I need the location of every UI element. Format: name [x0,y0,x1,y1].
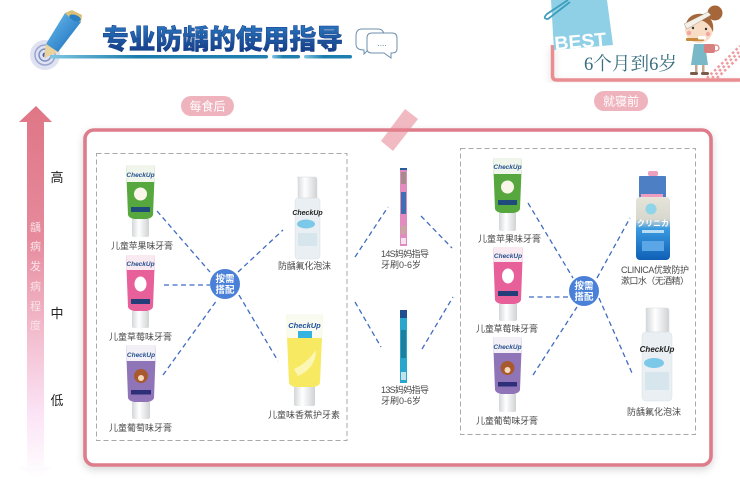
icon: speech bubbles: .... [378,39,386,48]
level labels: 低 [50,393,64,408]
label: 13S toothbrush [381,384,429,406]
label: strawberry toothpaste: 儿童草莓味牙膏 [109,331,172,342]
product: grape toothpaste: CheckUp [493,344,522,351]
connector lines [355,207,453,349]
arrow label: 病 [30,279,41,293]
hub: as needed: 按需 [215,273,235,285]
product: apple toothpaste [126,165,155,237]
arrow label: 龋 [30,220,41,234]
product: fluoride foam: CheckUp [640,345,674,354]
label: CLINICA mouthwash: 漱口水（无酒精） [621,275,689,286]
product: strawberry toothpaste [126,255,155,328]
arrow label: 病 [30,239,41,253]
label: 14S toothbrush: 牙刷0-6岁 [381,259,421,270]
product: apple toothpaste: CheckUp [493,164,522,171]
level labels [50,170,64,408]
panel: before-bed group [460,148,696,434]
panel: age card [545,0,740,80]
hub: as needed: 搭配 [574,291,594,303]
panel: main frame [85,130,711,465]
label: banana gel: 儿童味香蕉护牙素 [268,409,340,420]
age text: 6个月到6岁 [584,54,677,75]
icon: girl brushing teeth [684,6,722,75]
product: fluoride foam: CheckUp [292,210,323,217]
hub: as needed: 搭配 [215,284,235,296]
product: fluoride foam [640,308,674,401]
product: banana gel: CheckUp [288,321,321,330]
arrow label: 发 [30,259,41,273]
arrow: caries severity scale [19,106,52,480]
BEST badge text: BEST [554,29,608,55]
product: strawberry toothpaste [493,247,523,321]
arrow label [30,220,41,332]
icon: speech bubbles [356,29,397,58]
product: apple toothpaste: CheckUp [126,172,155,179]
product: CLINICA mouthwash [636,171,670,260]
pink dot ribbon [707,46,740,78]
product: 13S toothbrush [400,310,407,383]
hub: as needed [569,276,599,306]
title text: 专业防龋的使用指导 [102,24,343,55]
icon: pencil [44,10,82,58]
icon: target circle [30,40,60,70]
title underline [50,55,352,58]
panel: after-meal group [96,154,347,440]
product: CLINICA mouthwash: クリニカ [637,218,669,228]
label: apple toothpaste: 儿童苹果味牙膏 [478,233,541,244]
label: 13S toothbrush: 13S妈妈指导 [381,384,429,395]
heading: title banner [30,10,397,70]
product: grape toothpaste [126,345,156,419]
product: apple toothpaste [493,158,522,231]
label: 14S toothbrush: 14S妈妈指导 [381,248,429,259]
label: apple toothpaste: 儿童苹果味牙膏 [111,240,173,251]
product: banana gel [286,314,323,406]
product: fluoride foam [292,177,323,259]
decorative tape [381,109,418,151]
product: strawberry toothpaste: CheckUp [494,253,522,260]
connector lines [528,203,632,375]
hub: as needed [210,269,240,299]
label: 14S toothbrush [381,248,429,270]
product: strawberry toothpaste: CheckUp [126,261,155,268]
label: strawberry toothpaste: 儿童草莓味牙膏 [476,323,538,334]
pill: before bed [594,91,648,111]
connector lines [157,211,283,375]
hub: as needed: 按需 [574,280,594,292]
product: 14S toothbrush [400,168,407,246]
pill: after meals [181,96,234,116]
label: fluoride foam: 防龋氟化泡沫 [627,406,681,417]
product: grape toothpaste: CheckUp [127,352,155,359]
card border [552,45,740,80]
label: grape toothpaste: 儿童葡萄味牙膏 [476,415,538,426]
label: 13S toothbrush: 牙刷0-6岁 [381,395,421,406]
label: CLINICA mouthwash: CLINICA优致防护 [621,264,689,275]
arrow label: 程 [30,300,41,313]
level labels: 中 [50,306,64,321]
pill: before bed: 就寝前 [603,94,639,108]
label: fluoride foam: 防龋氟化泡沫 [278,260,331,271]
panel: toothbrushes [355,168,453,406]
icon: paperclip [545,0,570,19]
blue note [551,0,613,50]
pill: after meals: 每食后 [189,98,226,114]
label: grape toothpaste: 儿童葡萄味牙膏 [109,422,172,433]
label: CLINICA mouthwash [621,264,689,286]
arrow label: 度 [30,318,41,332]
product: grape toothpaste [493,337,522,412]
level labels: 高 [50,170,64,185]
